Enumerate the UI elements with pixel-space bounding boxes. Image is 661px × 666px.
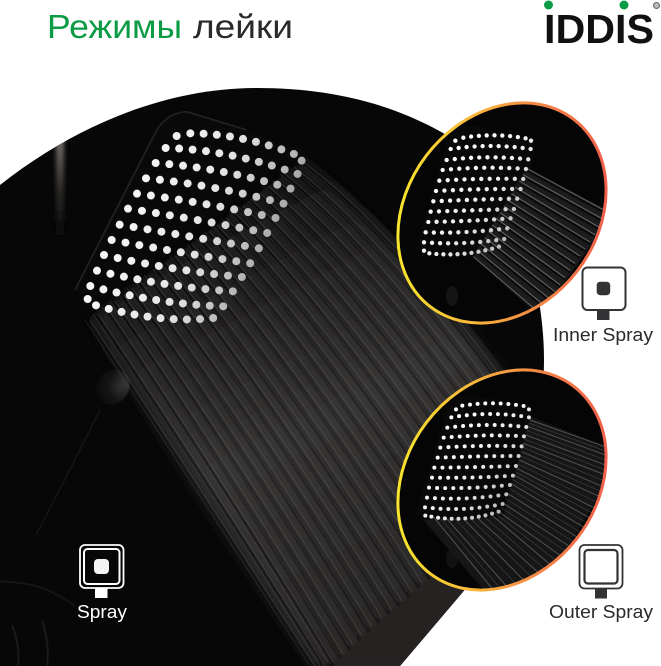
inset ring	[355, 62, 649, 364]
shower handle	[0, 410, 100, 666]
inset spray streaks	[423, 417, 610, 593]
title	[47, 8, 293, 45]
shower head body	[74, 111, 247, 290]
inset: inner spray photo	[396, 101, 608, 325]
handle button	[102, 370, 130, 404]
inset knob	[446, 550, 458, 568]
icon: spray	[80, 545, 124, 598]
inset spray streaks	[473, 168, 603, 308]
inset nozzle dots	[424, 135, 531, 254]
icon: inner spray	[582, 268, 626, 320]
inset head body	[415, 395, 530, 525]
inset: outer spray photo	[396, 368, 608, 592]
title: Режимы	[47, 8, 182, 45]
title: лейки	[193, 8, 293, 45]
icon: outer spray	[580, 545, 622, 598]
shower pipe highlight	[56, 125, 64, 235]
logo: IDDIS: IDDIS	[544, 6, 654, 52]
label: Outer Spray: Outer Spray	[549, 602, 653, 622]
inset ring	[355, 329, 649, 631]
main photo: shower head in black circle	[0, 80, 567, 666]
water spray	[84, 160, 504, 666]
inset knob	[446, 286, 458, 306]
shower head nozzle dots	[88, 133, 302, 319]
label: Inner Spray: Inner Spray	[553, 325, 653, 345]
label: Spray: Spray	[77, 602, 127, 622]
inset head body	[415, 125, 535, 260]
inset nozzle dots	[425, 403, 529, 519]
